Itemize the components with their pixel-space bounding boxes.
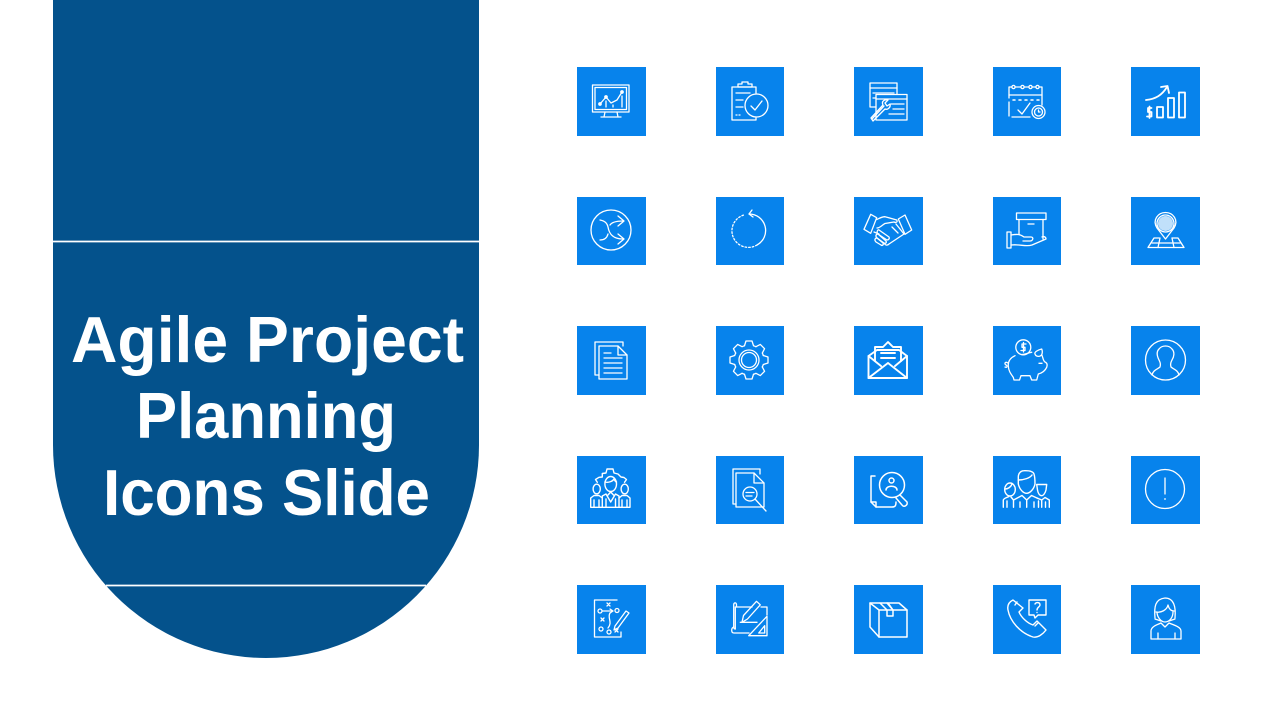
icon: hand holding box: [1007, 213, 1046, 248]
tile: location pin on map: [1131, 197, 1200, 265]
title: Planning: [136, 380, 396, 452]
icon: strategy playbook with pencil: [594, 600, 629, 637]
tile: document search: [716, 456, 784, 524]
tile: rising dollar bars: [1131, 67, 1200, 136]
tile: gear: [716, 326, 784, 395]
icon: exclamation in circle: [1146, 470, 1184, 508]
icon: browser windows with wrench: [870, 83, 907, 121]
tile: user profile: [1131, 326, 1200, 395]
tile: package: [854, 585, 923, 654]
title: Agile Project: [71, 304, 464, 376]
icon: handshake: [864, 214, 912, 245]
icon: magnifier over person on page: [871, 472, 907, 507]
icon: map pin: [1148, 212, 1184, 248]
icon: document with magnifier: [733, 469, 766, 511]
tile: phone question: [993, 585, 1061, 654]
tile: web windows wrench: [854, 67, 923, 136]
tile: dashed refresh circle: [716, 197, 784, 265]
panel: dark blue rounded banner: [53, 0, 479, 658]
tile: monitor chart: [577, 67, 646, 136]
tile: documents: [577, 326, 646, 395]
tile: group of people: [993, 456, 1061, 524]
tile: handshake: [854, 197, 923, 265]
icon: monitor with line chart: [592, 85, 629, 117]
icon: circular progress arrow: [732, 210, 766, 247]
icon: clipboard with check badge: [732, 82, 768, 120]
title: Icons Slide: [103, 457, 430, 529]
tile: clipboard check: [716, 67, 784, 136]
icon: stacked documents: [595, 342, 627, 379]
tile: alert: [1131, 456, 1200, 524]
icon: shuffle arrows in circle: [591, 210, 631, 250]
icon: gear: [730, 341, 768, 379]
tile: calendar check: [993, 67, 1061, 136]
icon: dollar growth bars: [1146, 86, 1185, 118]
tile: piggy bank: [993, 326, 1061, 395]
tile: woman profile: [1131, 585, 1200, 654]
icon grid: [577, 67, 1200, 654]
icon: blueprint with pencil and set square: [732, 601, 767, 636]
tile: person search: [854, 456, 923, 524]
title: [71, 304, 464, 529]
icon: calendar with check and clock: [1009, 85, 1045, 118]
tile: open envelope: [854, 326, 923, 395]
icon: woman avatar: [1151, 598, 1181, 639]
tile: strategy plan: [577, 585, 646, 654]
icon: piggy bank with coin: [1005, 340, 1047, 380]
tile: box on hand: [993, 197, 1061, 265]
icon: cardboard box: [870, 603, 907, 637]
tile: blueprint: [716, 585, 784, 654]
icon: team under gear: [591, 469, 630, 507]
tile: shuffle circle: [577, 197, 646, 265]
icon: user silhouette in circle: [1146, 340, 1186, 380]
icon: three business people: [1003, 471, 1049, 507]
tile: team with gear: [577, 456, 646, 524]
icon: open envelope with letter: [868, 342, 907, 378]
icon: phone with question bubble: [1008, 600, 1046, 637]
